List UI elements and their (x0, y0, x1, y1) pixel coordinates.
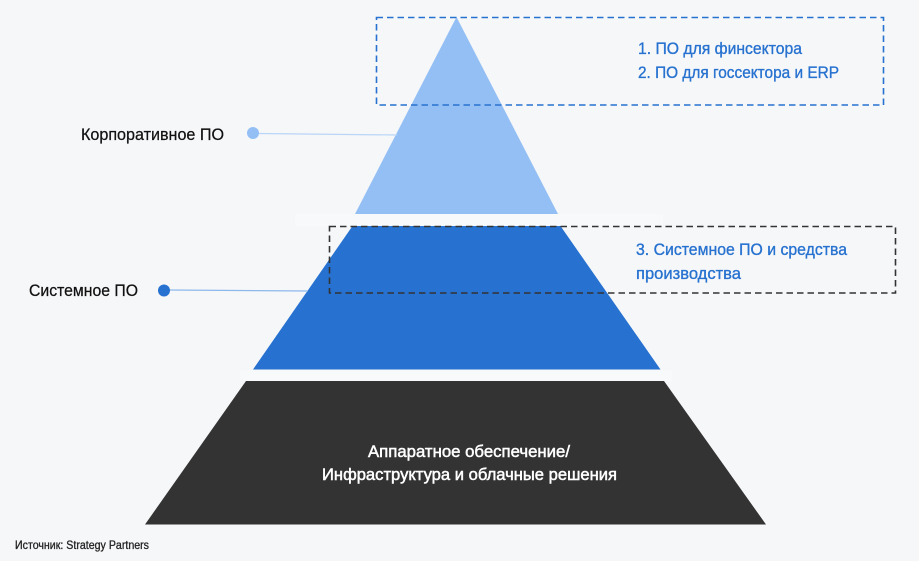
dashed box: corporate software segments (376, 18, 884, 105)
text: segments 1 and 2: 1. ПО для финсектора (638, 39, 803, 58)
text: segment 3: производства (636, 264, 742, 283)
tier label: hardware and infrastructure: Инфраструктура и облачные решения (322, 465, 617, 484)
pyramid tier: hardware and infrastructure (145, 381, 766, 524)
text: segments 1 and 2: 2. ПО для госсектора и ERP (638, 63, 839, 82)
text: segments 1 and 2 (638, 39, 839, 82)
tier label: hardware and infrastructure: Аппаратное обеспечение/ (368, 442, 570, 461)
pyramid tier: corporate software (355, 17, 558, 214)
dashed box: system software segment (330, 226, 896, 293)
label: system software: Системное ПО (29, 281, 138, 300)
source note: Источник: Strategy Partners (15, 538, 149, 552)
label: corporate software: Корпоративное ПО (81, 125, 224, 144)
connector: corporate software (258, 134, 397, 135)
label: corporate software (81, 125, 397, 144)
tier label: hardware and infrastructure (322, 442, 617, 484)
marker dot: corporate software (247, 127, 259, 139)
text: segment 3: 3. Системное ПО и средства (636, 240, 848, 259)
text: segment 3 (636, 240, 848, 283)
label: system software (29, 281, 308, 300)
pyramid tier: system software (253, 226, 660, 370)
marker dot: system software (158, 284, 170, 296)
connector: system software (168, 290, 308, 291)
